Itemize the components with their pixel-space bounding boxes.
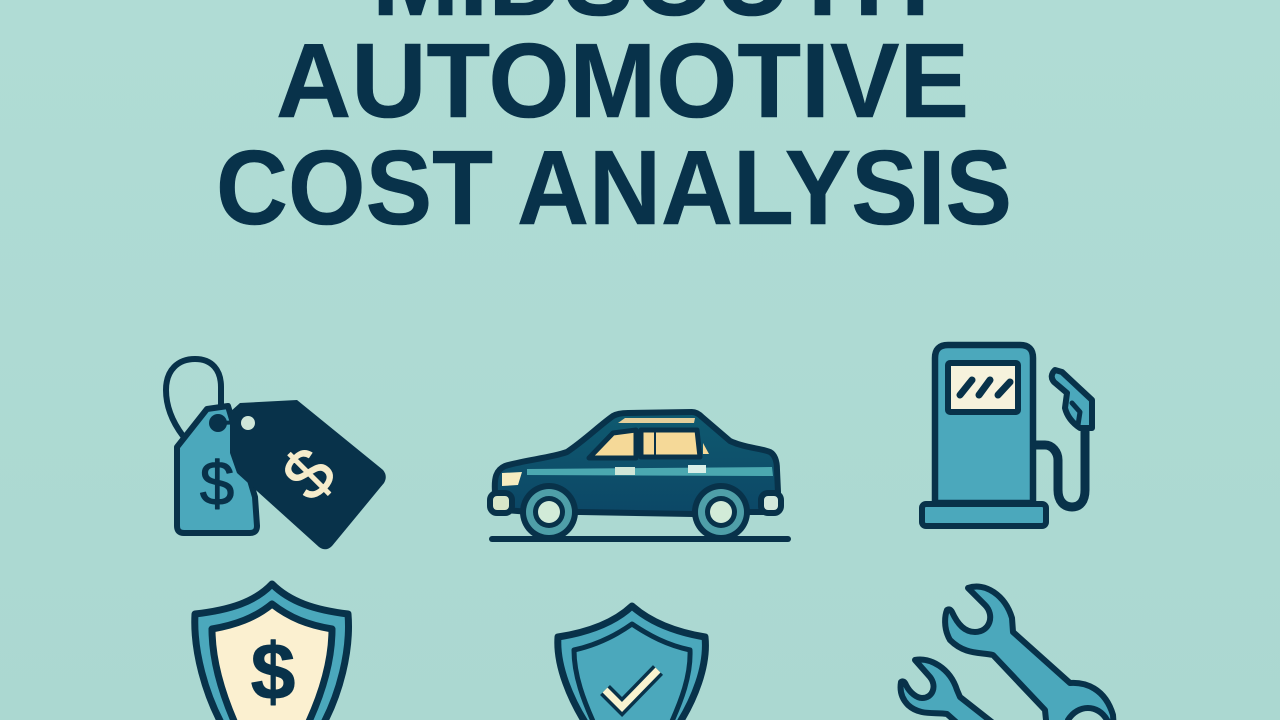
icon: car [490, 412, 788, 541]
icon: shield with dollar [195, 584, 348, 720]
icon: price tags [166, 359, 386, 549]
icon: wrenches [901, 587, 1114, 720]
title: COST ANALYSIS [216, 129, 1012, 247]
title: AUTOMOTIVE [276, 22, 969, 140]
title [216, 0, 1012, 247]
icon: shield with check [558, 606, 705, 720]
icon: price tags: $ [267, 432, 350, 515]
icon: fuel pump [922, 345, 1092, 526]
icon: shield with dollar: $ [251, 627, 295, 716]
icon: price tags: $ [200, 450, 234, 519]
